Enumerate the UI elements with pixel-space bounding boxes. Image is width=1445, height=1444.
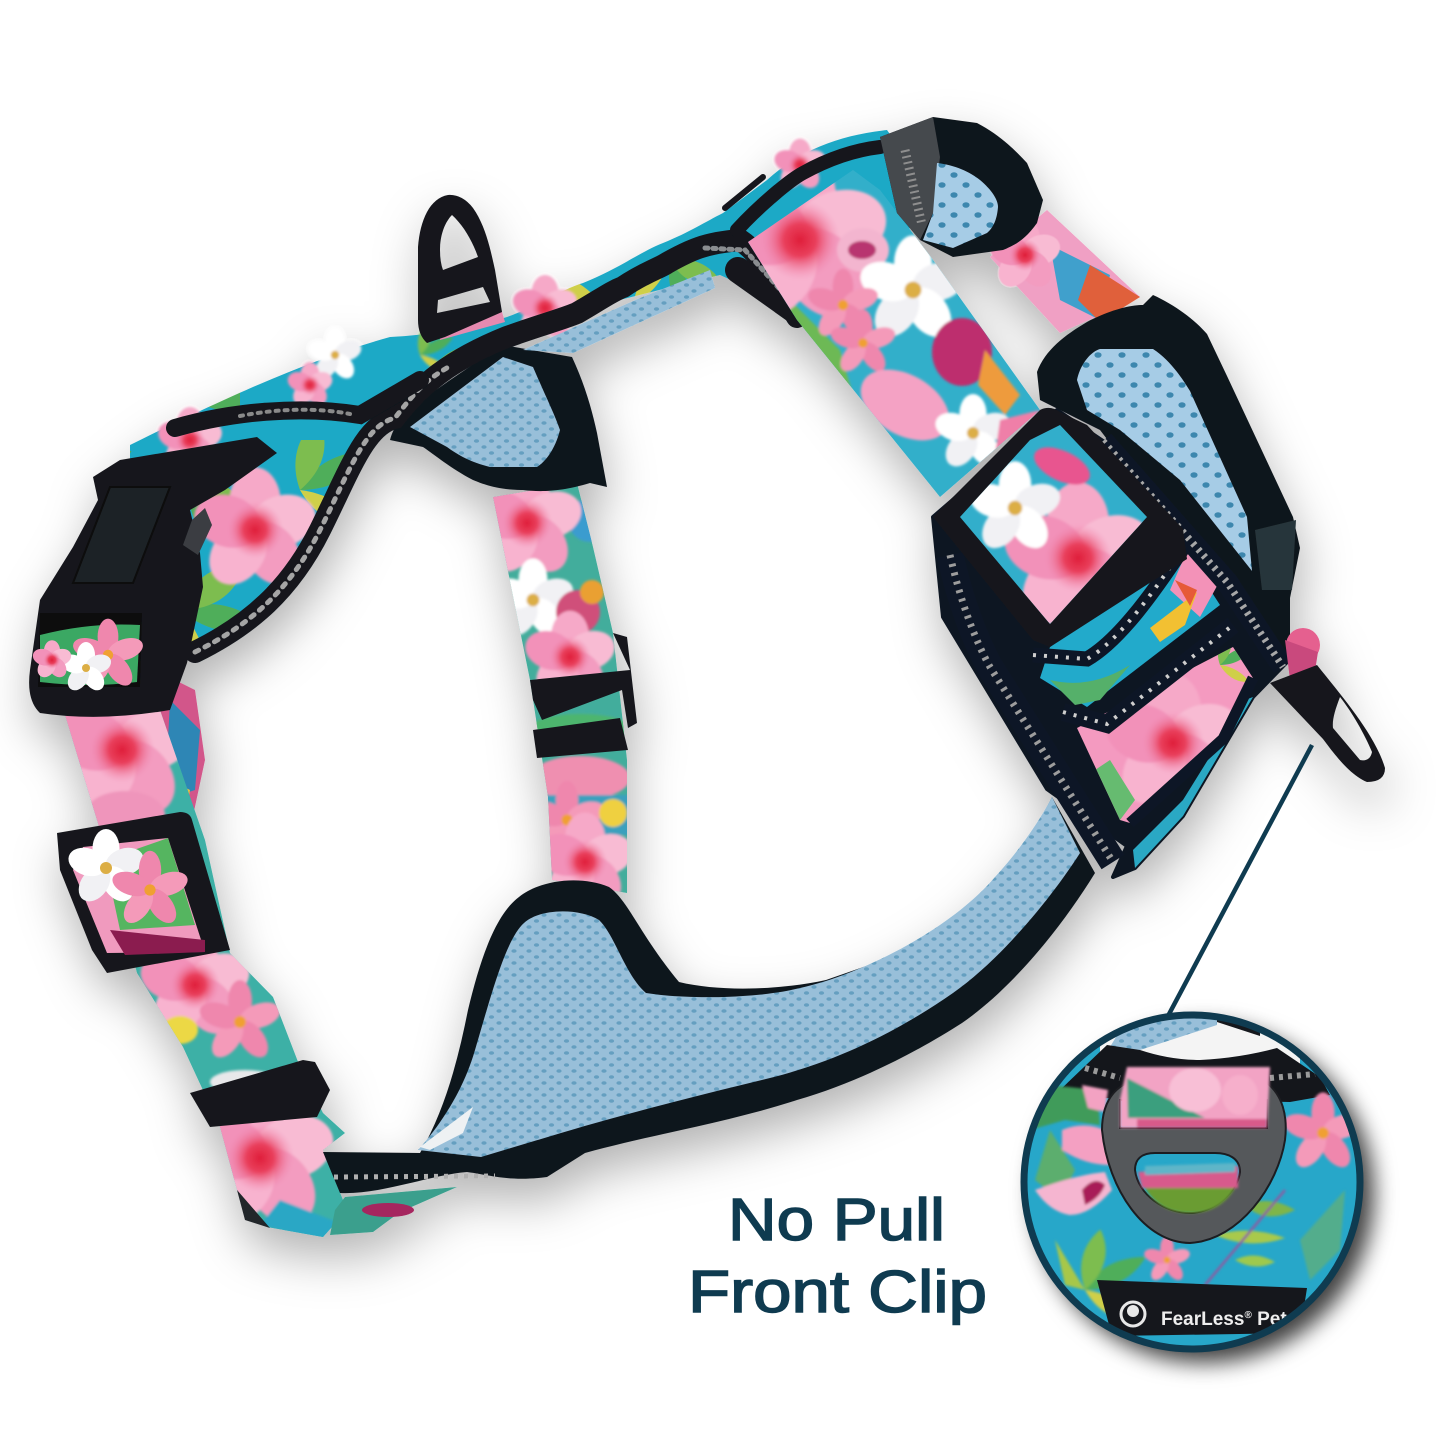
- chest mesh pad: [323, 797, 1095, 1193]
- left strap slider: [57, 812, 230, 973]
- brand label: ®: [1244, 1310, 1252, 1321]
- right mesh pad: [1037, 295, 1300, 659]
- strap shadow tab: [237, 1190, 270, 1228]
- top panel flowers: [154, 139, 828, 596]
- D ring: [1102, 1083, 1286, 1243]
- left front strap: [44, 677, 360, 1245]
- front clip: [1270, 628, 1385, 782]
- callout text: No Pull Front Clip: Front Clip: [688, 1259, 987, 1325]
- shoulder strap: [748, 170, 1056, 531]
- brand label: Pet: [1252, 1309, 1287, 1330]
- rear left strap: [120, 675, 205, 830]
- lower strap slider: [190, 1060, 330, 1127]
- centre mesh pad: [390, 270, 715, 491]
- care label: [420, 1107, 473, 1150]
- harness: [29, 117, 1385, 1245]
- brand label: FearLess: [1161, 1309, 1244, 1330]
- callout circle: front clip detail: [1020, 1010, 1365, 1355]
- callout line: [1168, 745, 1312, 1016]
- rear right strap: [986, 210, 1140, 333]
- rear middle strap: [467, 467, 640, 914]
- strap through ring: [1120, 1067, 1270, 1213]
- stitched back edge: [175, 147, 880, 652]
- front chest pad: [933, 410, 1290, 877]
- top back panel: [130, 130, 940, 655]
- callout text: No Pull Front Clip: No Pull: [728, 1187, 945, 1253]
- middle strap sliders: [530, 633, 637, 758]
- foliage and flowers: [1030, 1085, 1365, 1321]
- front pad stitching: [950, 441, 1283, 862]
- magnified photo contents: [1034, 1018, 1352, 1336]
- side release buckle: [29, 437, 277, 717]
- bottom floral strip: [330, 1187, 457, 1235]
- brand label: [1097, 1280, 1307, 1336]
- top D ring: [418, 195, 502, 343]
- square slider: [933, 408, 1187, 647]
- callout text: No Pull Front Clip: [688, 1187, 987, 1325]
- strap through top D ring: [437, 305, 505, 340]
- top mesh pad: [880, 117, 1043, 257]
